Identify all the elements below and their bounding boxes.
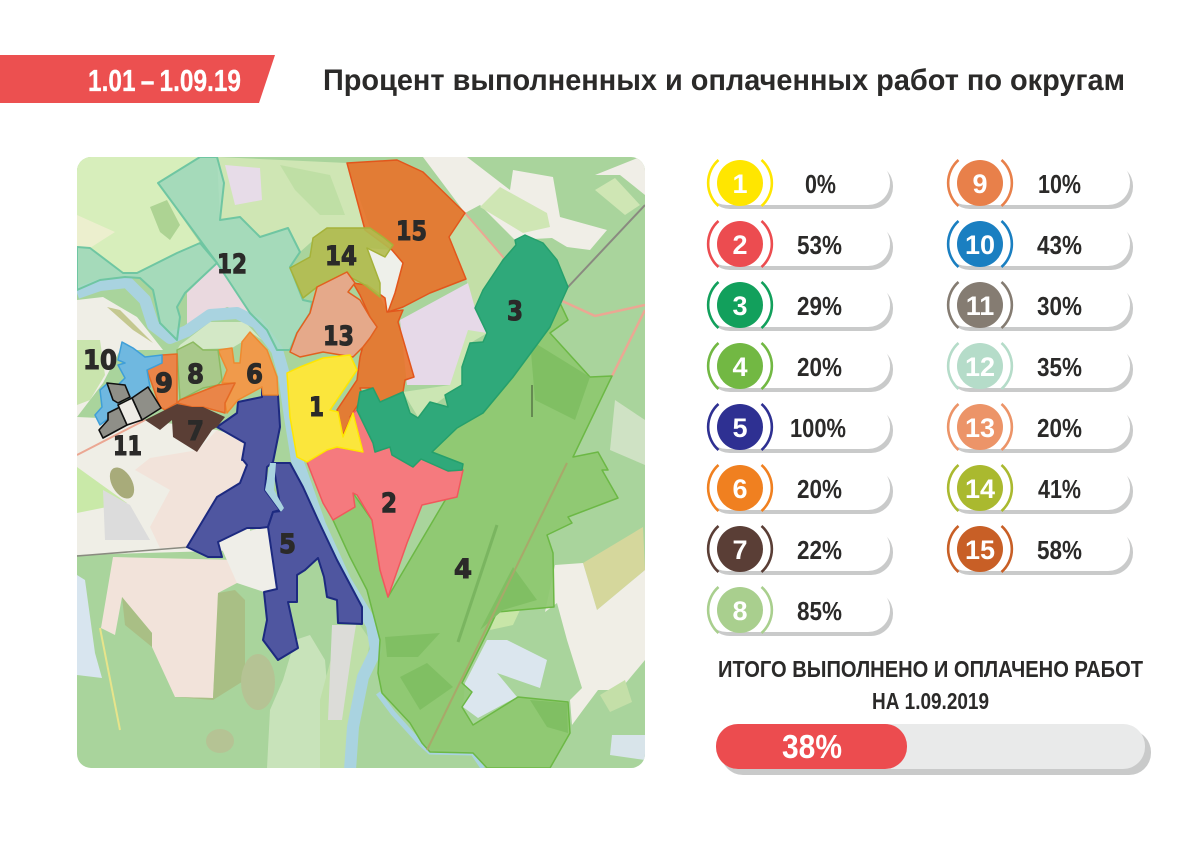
- total progress bar: [716, 724, 1151, 775]
- map district numbers: 8: [187, 359, 204, 390]
- legend item 7: [705, 526, 893, 575]
- district 11: [99, 383, 161, 438]
- legend item 14: [945, 465, 1133, 514]
- legend item 8: 85%: [797, 596, 842, 626]
- legend item 12: 12: [965, 352, 995, 382]
- legend item 15: 58%: [1037, 535, 1082, 565]
- legend item 13: 20%: [1037, 413, 1082, 443]
- legend item 3: 29%: [797, 291, 842, 321]
- panel: district map: [77, 157, 645, 770]
- district 6: [218, 332, 278, 413]
- legend item 7: 22%: [797, 535, 842, 565]
- map district numbers: 9: [155, 368, 173, 399]
- legend item 8: [705, 587, 893, 636]
- legend item 1: 1: [732, 169, 748, 199]
- title: Процент выполненных и оплаченных работ по округам: [323, 64, 1125, 97]
- legend item 13: [945, 404, 1133, 453]
- district 10: [95, 342, 162, 425]
- legend item 10: 10: [965, 230, 995, 260]
- legend item 10: 43%: [1037, 230, 1082, 260]
- map district numbers: 13: [323, 321, 354, 352]
- legend item 9: [945, 160, 1133, 209]
- district 1: [287, 355, 363, 462]
- district 8: [177, 342, 222, 400]
- legend item 2: 2: [732, 230, 748, 260]
- district 14: [290, 228, 393, 298]
- district 5: [187, 387, 362, 660]
- map district numbers: 10: [83, 345, 117, 376]
- legend item 9: 9: [972, 169, 988, 199]
- total progress bar: 38%: [782, 728, 842, 765]
- map district numbers: 14: [325, 241, 357, 272]
- legend item 13: 13: [965, 413, 995, 443]
- map district numbers: 6: [246, 359, 263, 390]
- date banner: [0, 55, 275, 103]
- district 13: [290, 272, 377, 357]
- map district numbers: [83, 216, 523, 585]
- legend item 14: 14: [965, 474, 995, 504]
- legend item 12: 35%: [1037, 352, 1082, 382]
- legend item 1: 0%: [805, 169, 836, 199]
- district 7: [145, 404, 225, 452]
- legend item 6: 6: [732, 474, 748, 504]
- legend item 6: [705, 465, 893, 514]
- date banner: 1.01 – 1.09.19: [88, 63, 241, 98]
- legend item 11: 11: [966, 291, 994, 321]
- total heading: ИТОГО ВЫПОЛНЕНО И ОПЛАЧЕНО РАБОТ: [718, 656, 1143, 682]
- map district numbers: 12: [217, 249, 247, 280]
- map district numbers: 2: [381, 488, 397, 519]
- legend item 11: 30%: [1037, 291, 1082, 321]
- map district numbers: 3: [507, 296, 523, 327]
- legend item 14: 41%: [1038, 474, 1081, 504]
- map district numbers: 15: [396, 216, 427, 247]
- district 9: [147, 354, 235, 413]
- legend item 7: 7: [732, 535, 748, 565]
- legend item 4: 4: [732, 352, 748, 382]
- legend item 11: [945, 282, 1133, 331]
- legend item 5: [705, 404, 893, 453]
- district 3: [357, 235, 568, 471]
- total heading: [718, 656, 1143, 714]
- legend item 1: [705, 160, 893, 209]
- map district numbers: 11: [113, 431, 142, 462]
- map district numbers: 4: [454, 554, 472, 585]
- district 12: [77, 157, 312, 350]
- legend item 4: [705, 343, 893, 392]
- legend item 2: [705, 221, 893, 270]
- total heading: НА 1.09.2019: [872, 688, 989, 714]
- district 4: [333, 303, 618, 768]
- legend item 3: 3: [732, 291, 748, 321]
- map district numbers: 7: [187, 416, 204, 447]
- legend item 9: 10%: [1038, 169, 1081, 199]
- river sliver between lobes: [265, 463, 284, 512]
- legend item 15: 15: [965, 535, 995, 565]
- district 2: [307, 410, 463, 597]
- legend item 4: 20%: [797, 352, 842, 382]
- legend item 12: [945, 343, 1133, 392]
- legend item 10: [945, 221, 1133, 270]
- map district numbers: 5: [279, 529, 296, 560]
- legend item 5: 5: [732, 413, 748, 443]
- legend item 8: 8: [732, 596, 748, 626]
- legend item 3: [705, 282, 893, 331]
- legend item 2: 53%: [797, 230, 842, 260]
- district 15: [337, 160, 466, 437]
- map district numbers: 1: [309, 392, 324, 423]
- legend item 5: 100%: [790, 413, 846, 443]
- legend item 15: [945, 526, 1133, 575]
- legend item 6: 20%: [797, 474, 842, 504]
